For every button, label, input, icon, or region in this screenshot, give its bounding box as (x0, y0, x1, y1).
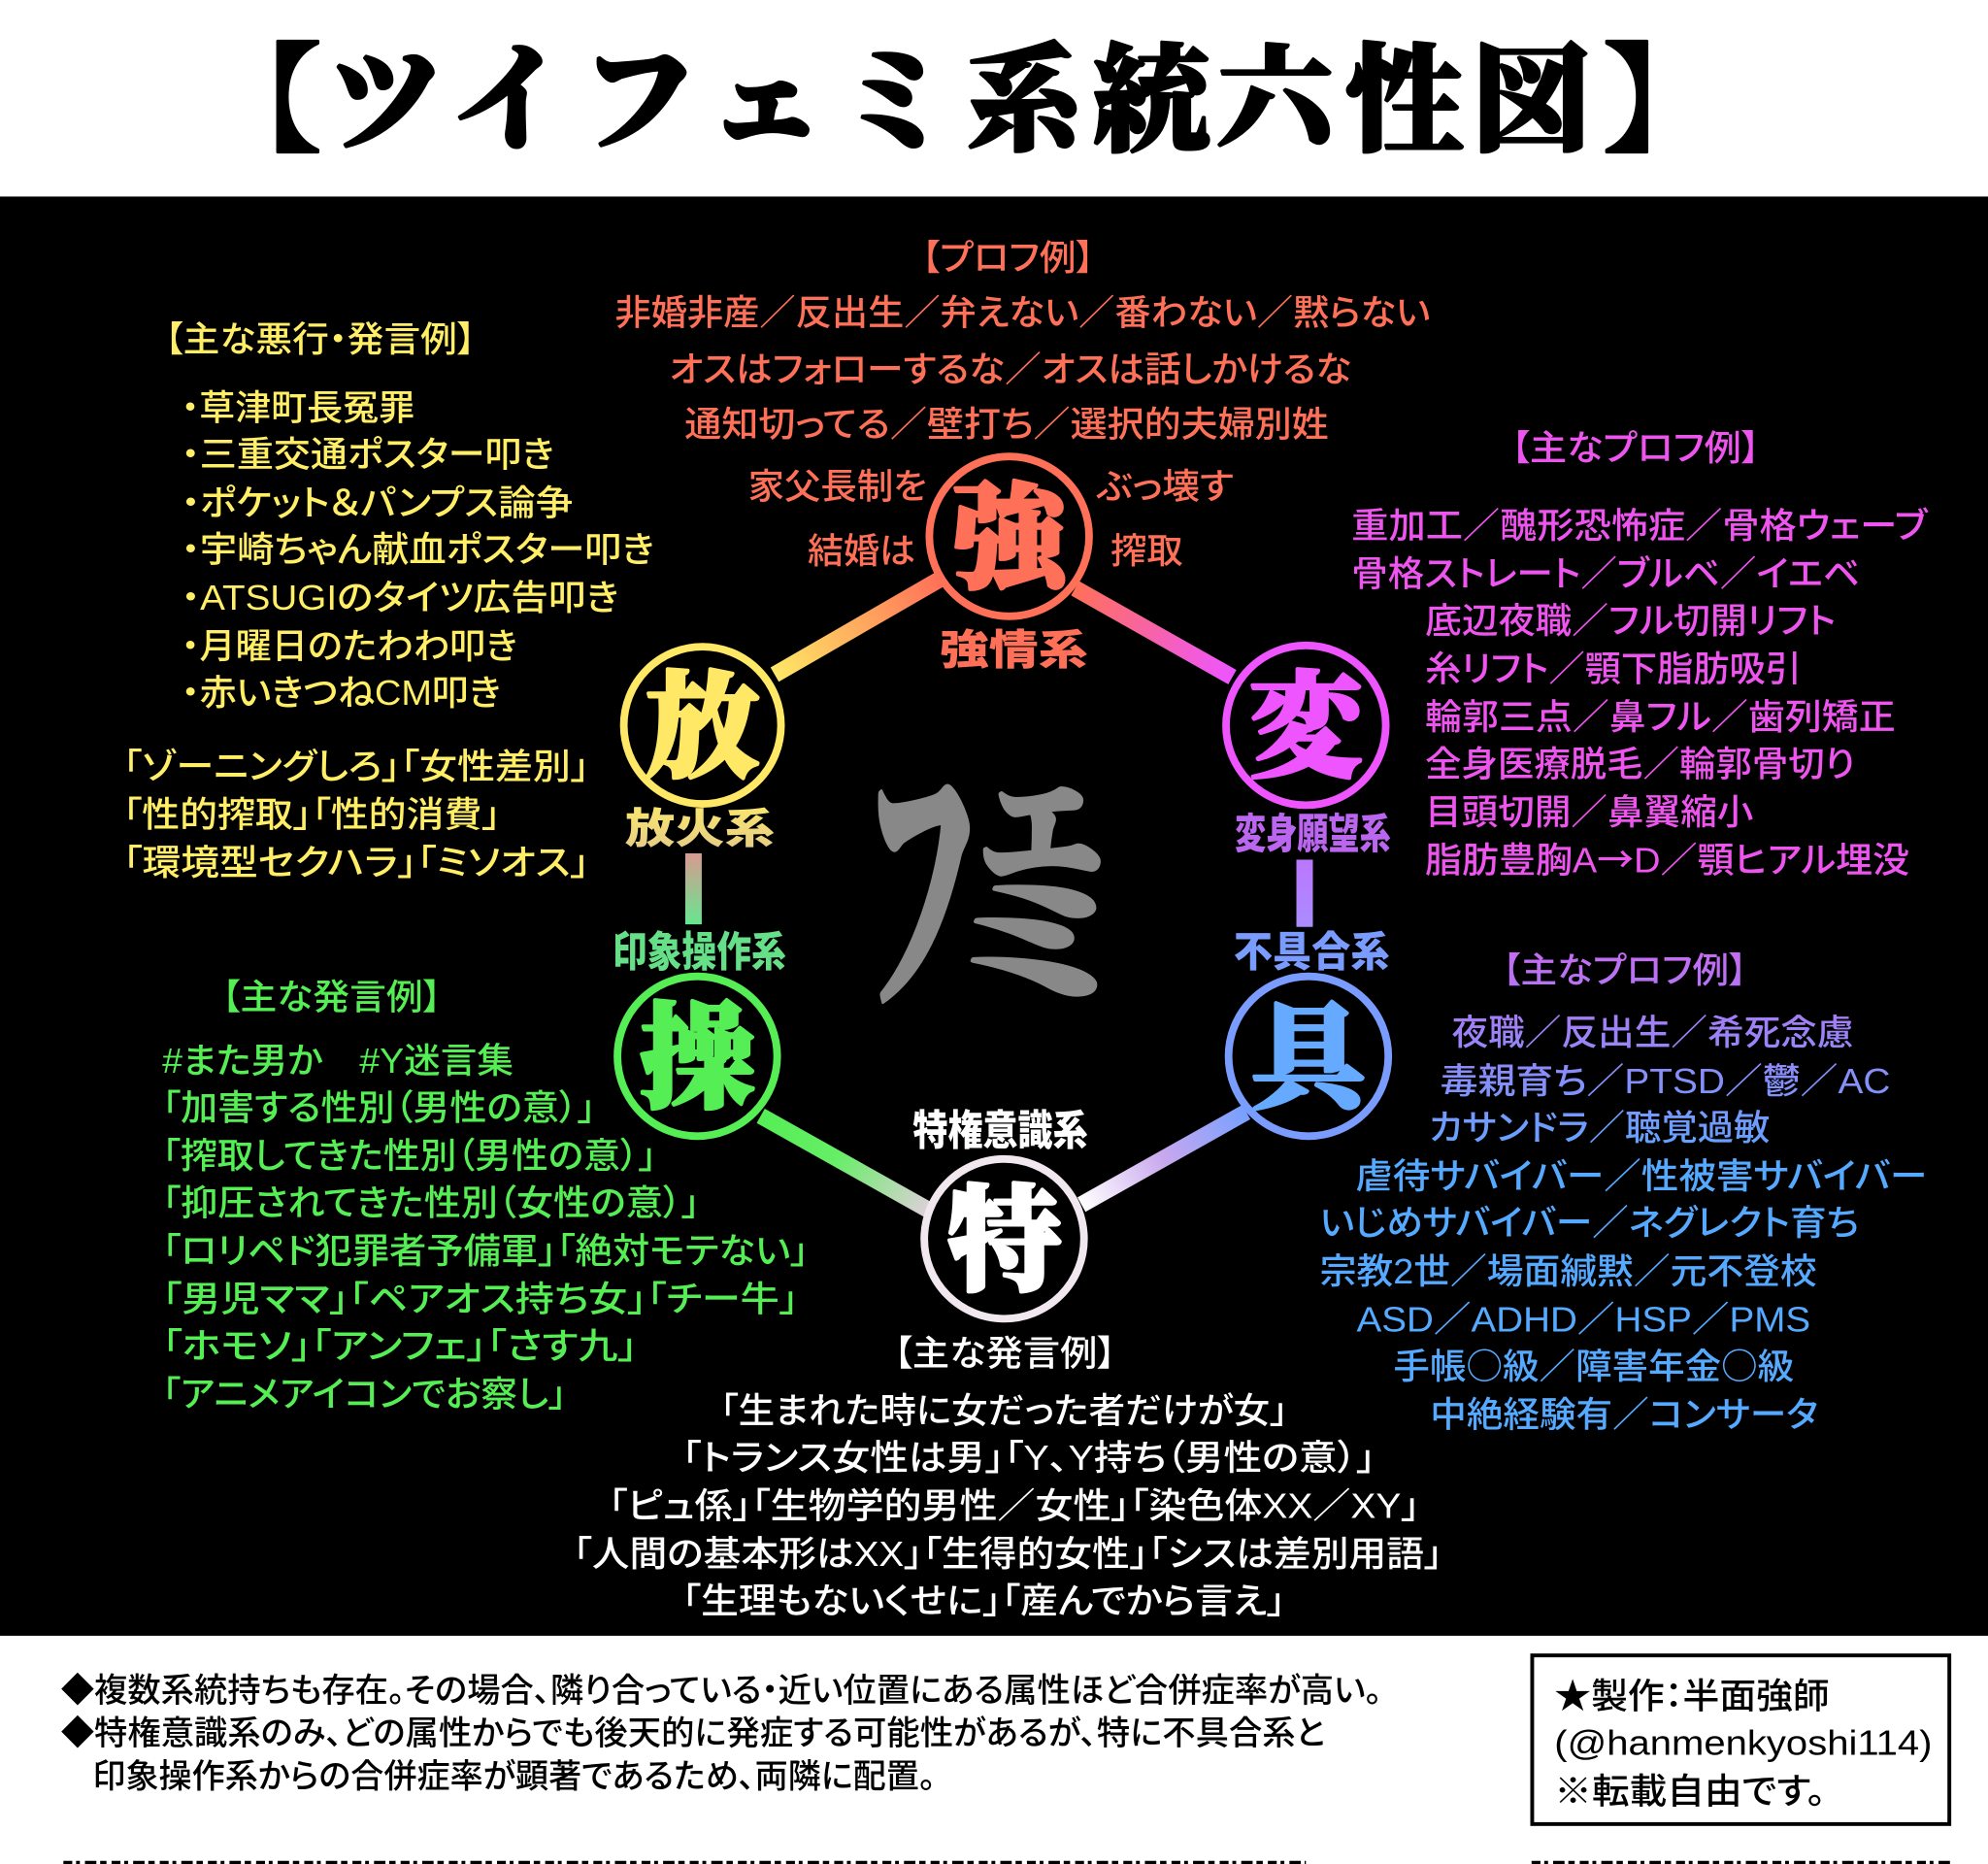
node: 操: 操 (641, 967, 754, 1131)
text block: 特権意識系 examples (573, 1334, 1442, 1620)
text block: 変身願望系 profile examples: 底辺夜職／フル切開リフト (1425, 601, 1836, 641)
text block: 印象操作系 examples (162, 978, 809, 1414)
text block: 不具合系 profile examples (1320, 950, 1927, 1434)
text block: 不具合系 profile examples: 手帳○級／障害年金○級 (1393, 1338, 1794, 1389)
footnotes: ◆特権意識系のみ、どの属性からでも後天的に発症する可能性があるが、特に不具合系と (61, 1715, 1325, 1752)
text block: 変身願望系 profile examples: 目頭切開／鼻翼縮小 (1425, 792, 1753, 832)
text block: 放火系 examples (123, 319, 654, 882)
text block: 放火系 examples: ・ポケット＆パンプス論争 (182, 483, 573, 522)
node labels: 不具合系 (1234, 918, 1390, 979)
text block: 変身願望系 profile examples: 重加工／醜形恐怖症／骨格ウェーブ (1351, 506, 1929, 546)
text block: 変身願望系 profile examples: 【主なプロフ例】 (1511, 428, 1760, 468)
text block: 特権意識系 examples: 「トランス女性は男」「Y、Y持ち（男性の意）」 (682, 1438, 1375, 1478)
text block: 印象操作系 examples: 【主な発言例】 (222, 978, 442, 1017)
clipped bottom text row (63, 1861, 1950, 1864)
node labels (613, 616, 1391, 1157)
node labels: 強情系 (940, 616, 1088, 677)
text block: 強情系 profile examples: 通知切ってる／壁打ち／選択的夫婦別姓 (684, 404, 1329, 444)
text block: 強情系 profile examples: 【プロフ例】 (922, 238, 1094, 278)
node labels: 印象操作系 (613, 918, 786, 979)
text block: 強情系 profile examples (614, 238, 1430, 571)
center logo: フェミ: エ (978, 721, 1103, 922)
text block: 変身願望系 profile examples: 輪郭三点／鼻フル／歯列矯正 (1425, 697, 1896, 737)
title: 【ツイフェミ系統六性図】 (204, 8, 1720, 175)
text block: 不具合系 profile examples: ASD／ADHD／HSP／PMS (1357, 1299, 1810, 1339)
text block: 強情系 profile examples: 家父長制を (748, 466, 927, 506)
text block: 印象操作系 examples: 「搾取してきた性別（男性の意）」 (162, 1136, 657, 1176)
text block: 不具合系 profile examples: 【主なプロフ例】 (1503, 950, 1747, 990)
text block: 変身願望系 profile examples: 骨格ストレート／ブルベ／イエベ (1351, 553, 1860, 593)
text block: 変身願望系 profile examples: 脂肪豊胸A→D／顎ヒアル埋没 (1425, 832, 1909, 883)
text block: 放火系 examples: 「性的搾取」「性的消費」 (123, 795, 501, 835)
node: 変 (1226, 636, 1386, 805)
text block: 不具合系 profile examples: 虐待サバイバー／性被害サバイバー (1355, 1156, 1927, 1196)
node labels: 放火系 (625, 796, 775, 856)
text block: 放火系 examples: ・草津町長冤罪 (182, 387, 414, 427)
node: 特 (924, 1149, 1084, 1318)
text block: 放火系 examples: 【主な悪行・発言例】 (165, 319, 476, 359)
text block: 印象操作系 examples: 「男児ママ」「ペアオス持ち女」「チー牛」 (162, 1280, 799, 1319)
credit box: (@hanmenkyoshi114) (1554, 1723, 1933, 1763)
credit box: ★製作：半面強師 (1554, 1676, 1830, 1715)
node: 特: 特 (947, 1149, 1061, 1314)
text block: 不具合系 profile examples: 中絶経験有／コンサータ (1430, 1394, 1818, 1434)
node: 放: 放 (646, 636, 759, 800)
text block: 強情系 profile examples: 結婚は (808, 531, 915, 571)
text block: 特権意識系 examples: 「生まれた時に女だった者だけが女」 (720, 1390, 1288, 1430)
node: 強 (929, 448, 1089, 616)
footnotes (61, 1673, 1382, 1796)
hexagon connector lines (693, 580, 1305, 1210)
text block: 放火系 examples: ・月曜日のたわわ叩き (182, 626, 517, 666)
text block: 特権意識系 examples: 「人間の基本形はXX」「生得的女性」「シスは差別用語」 (573, 1534, 1442, 1574)
node: 具: 具 (1251, 967, 1383, 1131)
node labels: 変身願望系 (1235, 801, 1391, 861)
text block: 変身願望系 profile examples (1351, 428, 1929, 883)
text block: 印象操作系 examples: #また男か #Y迷言集 (162, 1041, 514, 1081)
node: 変: 変 (1249, 636, 1371, 800)
text block: 変身願望系 profile examples: 全身医療脱毛／輪郭骨切り (1425, 744, 1855, 783)
text block: 放火系 examples: 「環境型セクハラ」「ミソオス」 (123, 843, 589, 882)
credit box (1532, 1655, 1949, 1824)
text block: 印象操作系 examples: 「ホモソ」「アンフェ」「さす九」 (162, 1326, 638, 1366)
text block: 不具合系 profile examples: 夜職／反出生／希死念慮 (1452, 1013, 1854, 1052)
footnotes: 印象操作系からの合併症率が顕著であるため、両隣に配置。 (92, 1759, 936, 1796)
text block: 強情系 profile examples: 搾取 (1110, 531, 1183, 571)
text block: 変身願望系 profile examples: 糸リフト／顎下脂肪吸引 (1425, 649, 1802, 688)
text block: 不具合系 profile examples: カサンドラ／聴覚過敏 (1429, 1108, 1770, 1148)
text block: 放火系 examples: ・三重交通ポスター叩き (182, 435, 554, 475)
text block: 強情系 profile examples: ぶっ壊す (1096, 466, 1234, 506)
text block: 放火系 examples: 「ゾーニングしろ」「女性差別」 (123, 747, 589, 786)
text block: 放火系 examples: ・宇崎ちゃん献血ポスター叩き (182, 530, 654, 570)
node: 操 (617, 967, 778, 1136)
text block: 不具合系 profile examples: 宗教2世／場面緘黙／元不登校 (1320, 1251, 1817, 1291)
text block: 強情系 profile examples: 非婚非産／反出生／弁えない／番わない／黙らない (614, 292, 1430, 332)
text block: 不具合系 profile examples: 毒親育ち／PTSD／鬱／AC (1441, 1061, 1890, 1101)
text block: 放火系 examples: ・ATSUGIのタイツ広告叩き (182, 578, 618, 617)
node: 強: 強 (952, 448, 1077, 612)
center logo: フェミ (862, 674, 1156, 1069)
text block: 強情系 profile examples: オスはフォローするな／オスは話しかけるな (670, 350, 1351, 389)
node: 具 (1229, 967, 1388, 1136)
footnotes: ◆複数系統持ちも存在。その場合、隣り合っている・近い位置にある属性ほど合併症率が高い。 (61, 1673, 1382, 1710)
credit box: ※転載自由です。 (1554, 1771, 1826, 1811)
text block: 印象操作系 examples: 「抑圧されてきた性別（女性の意）」 (162, 1182, 700, 1222)
text block: 印象操作系 examples: 「ロリペド犯罪者予備軍」「絶対モテない」 (162, 1231, 809, 1271)
text block: 放火系 examples: ・赤いきつねCM叩き (182, 673, 501, 713)
center logo: フェミ: フ (862, 674, 980, 1069)
text block: 不具合系 profile examples: いじめサバイバー／ネグレクト育ち (1320, 1203, 1859, 1243)
text block: 印象操作系 examples: 「加害する性別（男性の意）」 (162, 1087, 596, 1127)
text block: 特権意識系 examples: 「生理もないくせに」「産んでから言え」 (682, 1581, 1285, 1620)
center logo: フェミ: ミ (923, 834, 1156, 1027)
node labels: 特権意識系 (912, 1097, 1088, 1157)
text block: 印象操作系 examples: 「アニメアイコンでお察し」 (162, 1374, 567, 1414)
black main panel (0, 196, 1988, 1636)
text block: 特権意識系 examples: 【主な発言例】 (894, 1334, 1115, 1374)
text block: 特権意識系 examples: 「ピュ係」「生物学的男性／女性」「染色体XX／XY」 (609, 1485, 1420, 1525)
